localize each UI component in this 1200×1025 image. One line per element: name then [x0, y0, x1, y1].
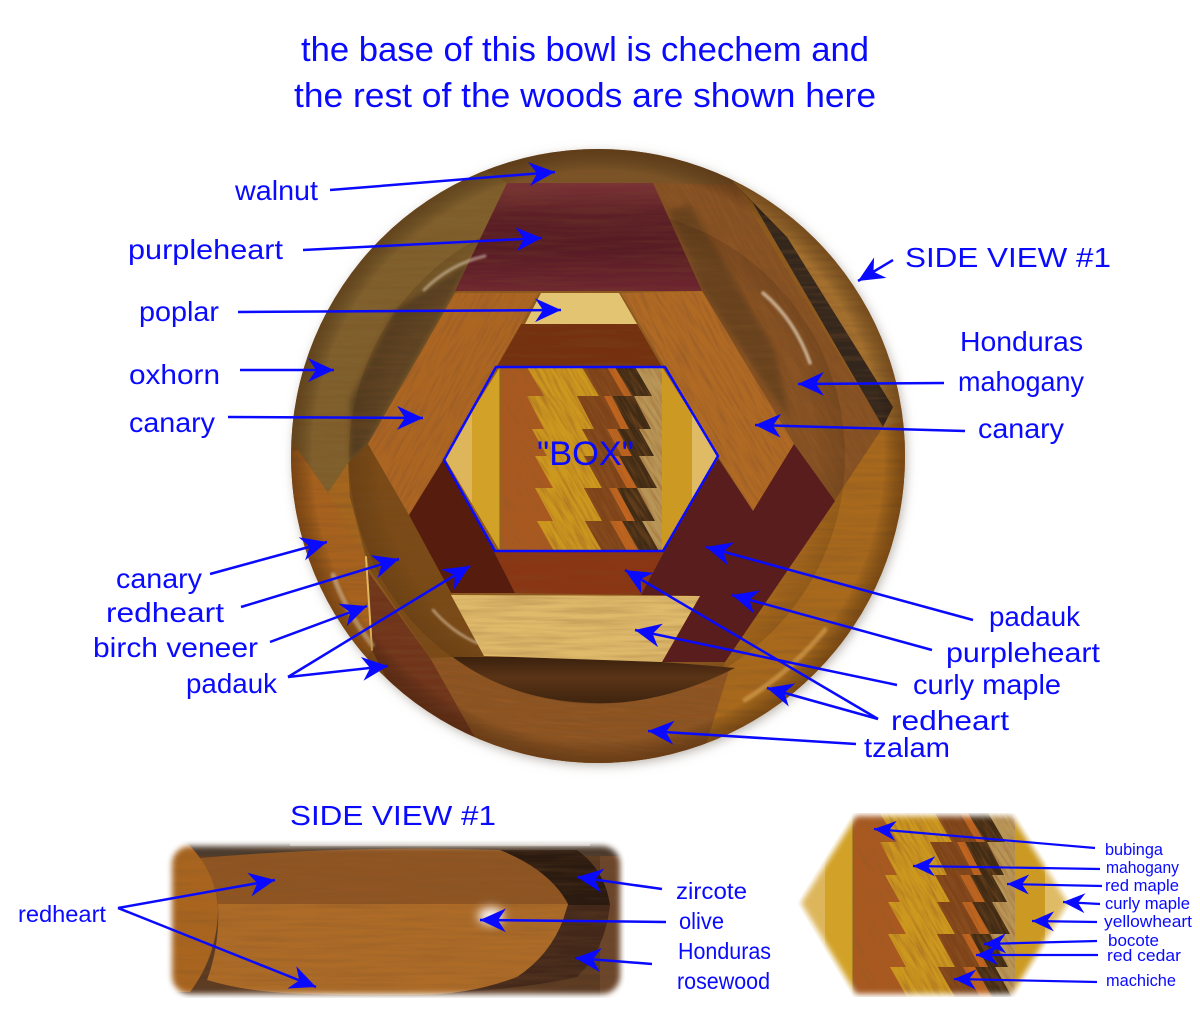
label: curly maple: [635, 630, 1061, 700]
photo: bowl top view: [290, 148, 906, 764]
wood: left well canary: [348, 444, 484, 658]
label: birch veneer: birch veneer: [93, 632, 258, 663]
wood: padauk strip: [368, 572, 475, 738]
well crescent: [453, 657, 735, 703]
poplar: [525, 293, 637, 324]
rim highlights: [333, 256, 825, 700]
label: redheart lower left: [106, 559, 399, 628]
label: machiche: [954, 972, 1176, 990]
wood: orange sliver: [328, 463, 365, 557]
label: padauk left: padauk: [186, 668, 278, 699]
label: walnut: walnut: [234, 175, 318, 206]
wood: oxhorn dark inner: [350, 262, 470, 462]
label: birch veneer: [93, 606, 367, 663]
redheart oval bottom: [207, 904, 568, 995]
label: redheart right: redheart: [891, 705, 1009, 736]
label: bubinga: [874, 829, 1164, 859]
label: red cedar: red cedar: [1107, 947, 1182, 965]
zircote: [500, 850, 610, 905]
label: machiche: machiche: [1106, 972, 1176, 990]
hexagon outline: [444, 367, 718, 551]
label: olive: olive: [679, 908, 724, 934]
outer end: [600, 856, 620, 994]
honduras rosewood: [454, 905, 610, 993]
purpleheart lower right: [641, 444, 835, 662]
purpleheart top: [455, 183, 702, 291]
wood: zircote strip: [733, 182, 893, 427]
label: zircote: zircote: [676, 878, 747, 904]
wood: walnut rim: [486, 149, 738, 185]
label: bubinga: bubinga: [1105, 841, 1164, 859]
label: oxhorn: oxhorn: [129, 359, 220, 390]
wood: lower right rim: [700, 420, 906, 764]
label: padauk right: padauk: [989, 601, 1081, 632]
label: tzalam: tzalam: [864, 732, 950, 763]
label: zircote: [577, 877, 747, 904]
label: padauk right: [706, 547, 1081, 632]
canary left band: [368, 293, 539, 515]
piece grain: right band: [621, 291, 794, 511]
label: padauk left: [186, 566, 470, 699]
label: purpleheart right: purpleheart: [946, 637, 1100, 668]
label: purpleheart: [128, 234, 542, 265]
label: canary lower left: canary: [116, 563, 202, 594]
label: honduras mahogany: mahogany: [958, 366, 1084, 397]
redheart upper: [496, 324, 662, 367]
label: red maple: red maple: [1105, 877, 1179, 895]
photo: side view: [165, 840, 625, 998]
label: redheart right: [625, 570, 1009, 736]
label: yellowheart: yellowheart: [1104, 913, 1192, 931]
label: canary right: canary: [978, 413, 1064, 444]
redheart oval top: [200, 849, 568, 904]
title: the base of this bowl is chechem and: [301, 31, 869, 69]
wood: tzalam: [470, 671, 728, 763]
label: poplar: poplar: [139, 296, 219, 327]
photo: box detail: [797, 813, 1072, 997]
label: redheart side view: redheart: [18, 901, 107, 927]
label: side view #1: [858, 242, 1111, 281]
left section: [165, 843, 218, 992]
wood: left rim canary: [291, 450, 371, 658]
redheart lower: [494, 552, 664, 595]
wood: honduras mahogany rim: [653, 183, 883, 500]
label: mahogany: [913, 859, 1180, 877]
label: side view #1: SIDE VIEW #1: [905, 242, 1111, 273]
wood: mahogany dark inner: [668, 205, 790, 420]
label: box: "BOX": [537, 435, 634, 473]
piece grain: left band: [368, 293, 539, 515]
label: canary left: canary: [129, 407, 215, 438]
box inset: [444, 367, 719, 551]
piece grain: horizontal: [451, 183, 702, 662]
heading: side view #1: SIDE VIEW #1: [290, 800, 496, 831]
label: bocote: [984, 932, 1159, 950]
label: honduras rosewood: Honduras: [678, 938, 771, 964]
label: bocote: bocote: [1108, 932, 1159, 950]
label: honduras rosewood: rosewood: [677, 968, 770, 994]
label: canary right: [755, 413, 1064, 444]
label: canary lower left: [116, 542, 327, 594]
highlight: [478, 908, 504, 924]
label: tzalam: [648, 731, 950, 763]
label: honduras mahogany: Honduras: [960, 326, 1083, 357]
curly maple: [451, 595, 700, 662]
label: curly maple: [1063, 895, 1190, 913]
label: honduras mahogany: [798, 326, 1084, 397]
bowl outer edge shade: [291, 149, 905, 763]
top dark band: [191, 844, 620, 856]
title: [294, 31, 876, 115]
bowl well shading: [349, 208, 845, 704]
label: walnut: [234, 172, 555, 206]
label: curly maple: curly maple: [913, 669, 1061, 700]
label: curly maple: curly maple: [1105, 895, 1190, 913]
label: honduras rosewood: [575, 938, 771, 994]
label: redheart side view: [18, 880, 316, 987]
label: redheart lower left: redheart: [106, 597, 224, 628]
padauk lower left: [409, 460, 515, 593]
label: mahogany: mahogany: [1106, 859, 1180, 877]
canary right band: [621, 291, 794, 511]
label: purpleheart: purpleheart: [128, 234, 283, 265]
title: the rest of the woods are shown here: [294, 77, 876, 115]
label: purpleheart right: [732, 595, 1100, 668]
wood: oxhorn: [290, 148, 507, 493]
wood: outer right rim: [733, 181, 904, 427]
